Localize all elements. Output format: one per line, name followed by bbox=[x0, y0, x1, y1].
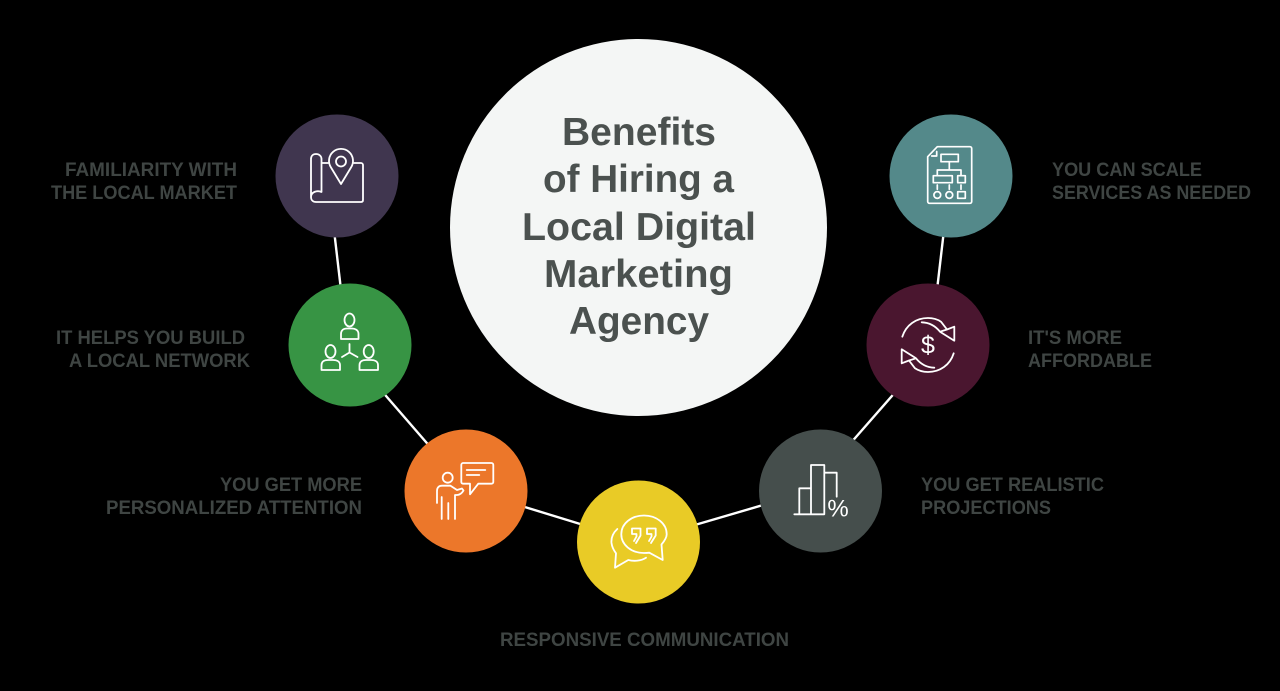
label bbox=[921, 475, 1104, 519]
icon: dollar with circular arrows bbox=[902, 318, 954, 372]
label: YOU CAN SCALE bbox=[1052, 160, 1202, 181]
icon: bar chart with percent bbox=[794, 465, 849, 522]
benefit: familiarity with the local market bbox=[51, 114, 398, 238]
label: PERSONALIZED ATTENTION bbox=[106, 498, 362, 519]
label bbox=[106, 475, 362, 519]
icon: connected people bbox=[322, 314, 378, 370]
label bbox=[56, 328, 250, 372]
title: Benefits bbox=[562, 111, 716, 154]
icon: map with location pin bbox=[311, 149, 363, 202]
label: FAMILIARITY WITH bbox=[65, 160, 237, 181]
label: YOU GET REALISTIC bbox=[921, 475, 1104, 496]
title bbox=[522, 111, 756, 343]
label: RESPONSIVE COMMUNICATION bbox=[500, 630, 789, 651]
label bbox=[1028, 328, 1152, 372]
label: IT'S MORE bbox=[1028, 328, 1122, 349]
title: Agency bbox=[569, 300, 710, 343]
label: SERVICES AS NEEDED bbox=[1052, 183, 1251, 204]
benefit: realistic projections bbox=[759, 430, 1104, 552]
central circle with title bbox=[450, 39, 827, 416]
label: AFFORDABLE bbox=[1028, 351, 1152, 372]
icon: bar chart with percent: % bbox=[827, 496, 849, 522]
label bbox=[1052, 160, 1251, 204]
icon: dollar with circular arrows: $ bbox=[921, 332, 935, 360]
title: Marketing bbox=[544, 253, 733, 296]
icon: person presenting with speech bubble bbox=[437, 463, 493, 519]
benefit: local network bbox=[56, 284, 412, 406]
icon: document with flow chart bbox=[928, 147, 972, 203]
benefit: responsive communication bbox=[500, 480, 789, 651]
label: IT HELPS YOU BUILD bbox=[56, 328, 245, 349]
benefit: personalized attention bbox=[106, 430, 528, 552]
benefit: more affordable bbox=[866, 284, 1152, 406]
label: A LOCAL NETWORK bbox=[69, 351, 250, 372]
title: Local Digital bbox=[522, 206, 756, 249]
title: of Hiring a bbox=[543, 158, 735, 201]
label: THE LOCAL MARKET bbox=[51, 183, 237, 204]
label: YOU GET MORE bbox=[220, 475, 362, 496]
benefit: scale services bbox=[890, 114, 1251, 238]
label bbox=[51, 160, 237, 204]
label: PROJECTIONS bbox=[921, 498, 1051, 519]
icon: quote speech bubbles bbox=[611, 516, 667, 568]
